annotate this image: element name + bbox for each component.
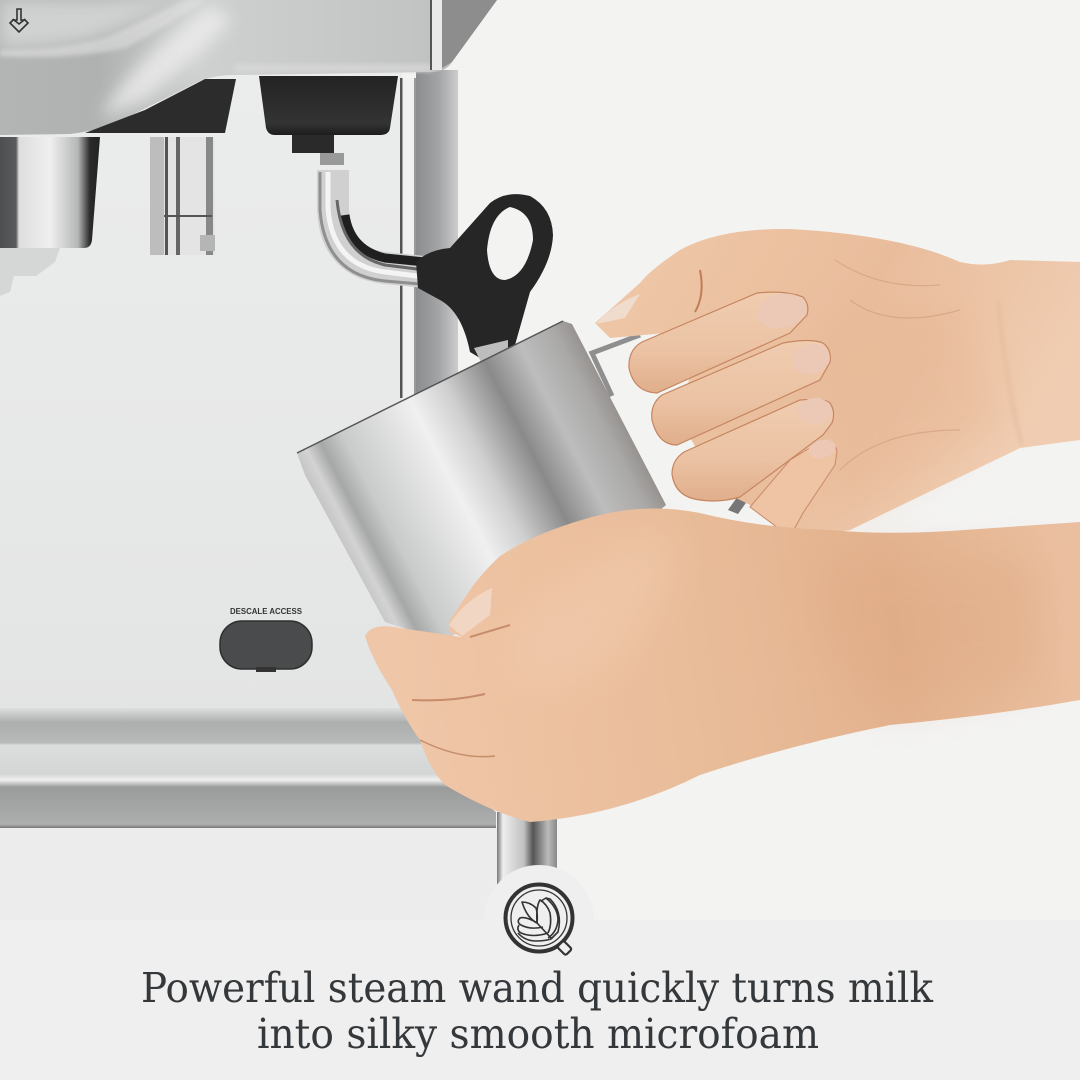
hand back and wrist xyxy=(595,229,1080,538)
caption xyxy=(141,964,934,1058)
index nail xyxy=(754,289,810,333)
pitcher body xyxy=(297,321,666,637)
ring finger xyxy=(672,399,834,501)
thumb nail xyxy=(449,588,492,636)
caption band xyxy=(0,920,1080,1080)
espresso machine xyxy=(0,0,557,920)
palm lines xyxy=(835,260,960,470)
milk pitcher xyxy=(297,321,758,637)
lower hand highlight xyxy=(510,530,673,687)
pitcher rim xyxy=(297,321,563,453)
little nail xyxy=(806,437,838,461)
steam wand pipe xyxy=(320,153,425,284)
caption line 1: Powerful steam wand quickly turns milk xyxy=(141,964,934,1012)
thumb nail xyxy=(596,294,640,324)
middle nail xyxy=(790,342,832,376)
lower hand xyxy=(365,508,1080,822)
group head dark collar xyxy=(85,79,236,133)
icon: latte art cup xyxy=(506,884,572,955)
head highlights xyxy=(0,0,497,118)
left group head cylinder xyxy=(0,137,100,248)
caption line 2: into silky smooth microfoam xyxy=(257,1010,819,1058)
machine side column xyxy=(416,70,458,400)
upper hand xyxy=(595,229,1080,538)
left spout xyxy=(0,248,60,296)
vertical trim strip xyxy=(400,78,416,398)
icon backdrop xyxy=(484,865,594,975)
steam wand black handle xyxy=(416,194,553,358)
top left drain icon xyxy=(10,9,28,32)
steam nut xyxy=(292,135,334,153)
hand shading xyxy=(820,300,1000,520)
brushed steel head xyxy=(0,0,497,135)
drip tray xyxy=(0,708,496,828)
descale access door xyxy=(220,621,312,672)
middle finger xyxy=(652,340,830,445)
index finger xyxy=(629,292,808,393)
lower hand shading xyxy=(816,555,1040,710)
pitcher lower handle xyxy=(728,482,758,514)
machine front panel xyxy=(0,70,402,720)
lower base xyxy=(0,828,500,920)
centre spout xyxy=(150,137,215,255)
thumb crease xyxy=(695,270,702,312)
lower hand and forearm xyxy=(365,508,1080,822)
machine foot xyxy=(497,812,557,887)
steam wand tip xyxy=(474,340,508,364)
finger creases xyxy=(412,625,510,757)
steam unit dark collar xyxy=(259,76,398,135)
descale label: DESCALE ACCESS xyxy=(230,606,302,616)
little finger xyxy=(750,440,837,537)
ring nail xyxy=(798,398,832,424)
pitcher upper handle xyxy=(592,335,640,396)
wrist crease xyxy=(998,300,1022,446)
